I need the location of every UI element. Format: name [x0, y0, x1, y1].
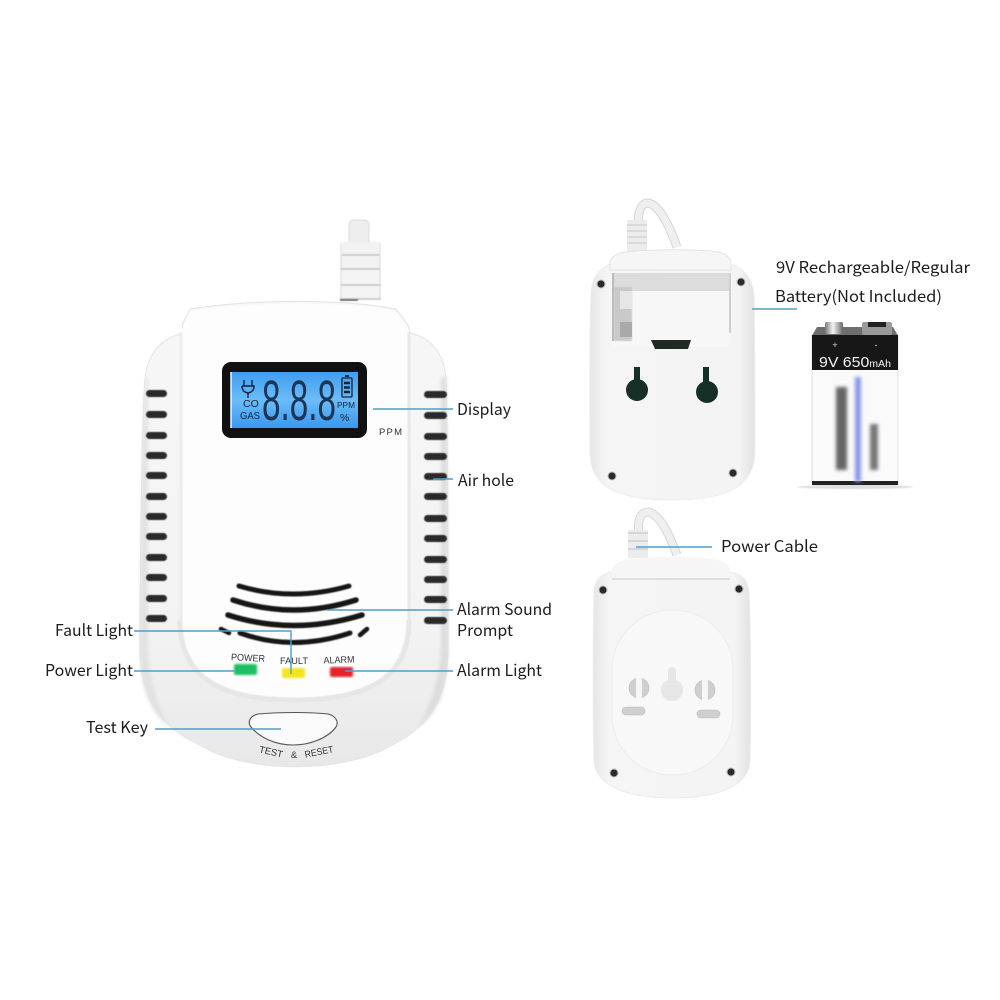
test key button — [249, 712, 337, 745]
LCD display: CO — [243, 398, 259, 410]
9V battery: - — [874, 340, 878, 350]
label: alarm sound prompt: Alarm Sound — [457, 596, 552, 620]
battery compartment — [610, 273, 733, 347]
battery rating: 9V 650 mAh — [819, 354, 891, 371]
fault LED — [282, 668, 305, 678]
power LED — [234, 664, 257, 675]
LCD battery icon — [342, 376, 352, 397]
label: display: Display — [457, 396, 512, 420]
battery top label — [812, 335, 898, 370]
battery terminals — [825, 322, 892, 335]
front plate — [180, 303, 409, 700]
label: battery note: 9V Rechargeable/Regular — [776, 254, 971, 278]
label: power light: Power Light — [45, 657, 133, 681]
9V battery: + — [832, 340, 838, 350]
front plate bottom bevel — [180, 620, 409, 700]
label: power cable: Power Cable — [721, 533, 818, 557]
test and reset label: RESET — [304, 744, 335, 761]
leader lines — [134, 309, 797, 729]
alarm LED — [330, 667, 353, 677]
keyhole right — [696, 367, 718, 403]
test and reset label: & — [291, 750, 298, 761]
rear shell — [593, 572, 751, 798]
main detector front view — [140, 220, 448, 767]
test and reset label: TEST — [258, 744, 284, 761]
LCD display — [222, 362, 367, 438]
LCD display: GAS — [240, 410, 260, 422]
rear top cap — [612, 557, 730, 579]
back shell — [590, 264, 755, 500]
mounting holes — [622, 678, 720, 718]
left air holes — [146, 390, 167, 622]
label: fault light: Fault Light — [55, 617, 133, 641]
test and reset label — [258, 744, 335, 761]
indicator labels: POWER — [231, 652, 265, 665]
keyhole left — [626, 367, 648, 401]
LCD display: PPM — [337, 400, 355, 410]
LCD display: % — [340, 412, 349, 424]
battery casing — [812, 328, 898, 485]
label: alarm light: Alarm Light — [457, 657, 542, 681]
left side edge shading — [140, 376, 170, 728]
label: alarm sound prompt: Prompt — [457, 617, 513, 641]
LCD plug icon — [242, 380, 254, 398]
indicator labels: ALARM — [323, 654, 355, 667]
detector body — [140, 301, 448, 767]
right side edge shading — [418, 376, 448, 728]
back screws — [597, 278, 745, 480]
speaker grille — [221, 586, 367, 642]
label: battery note: Battery(Not Included) — [775, 283, 942, 307]
back view with battery compartment — [590, 203, 755, 500]
cable loop — [627, 203, 677, 252]
hole centre ribs — [639, 677, 705, 701]
battery shoulder — [812, 327, 898, 336]
right plate bevel — [408, 332, 410, 622]
LCD display: 8.8.8 — [262, 369, 336, 433]
PPM printed label: PPM — [379, 427, 402, 438]
right air holes — [424, 391, 447, 624]
battery clip slot — [651, 340, 691, 349]
rear view with mounting plate — [593, 512, 751, 798]
indicator labels — [231, 652, 355, 667]
label: air hole: Air hole — [458, 467, 514, 491]
plug strain relief — [340, 220, 381, 300]
rear screws — [599, 585, 743, 777]
mounting plate — [612, 610, 733, 775]
blurred battery graphics — [836, 377, 878, 482]
label: test key: Test Key — [86, 714, 149, 738]
central keyhole — [661, 667, 683, 701]
rear cable loop — [628, 512, 677, 558]
indicator labels: FAULT — [280, 656, 308, 667]
top cap — [610, 250, 731, 270]
left plate bevel — [180, 332, 182, 622]
9V battery — [797, 322, 913, 489]
